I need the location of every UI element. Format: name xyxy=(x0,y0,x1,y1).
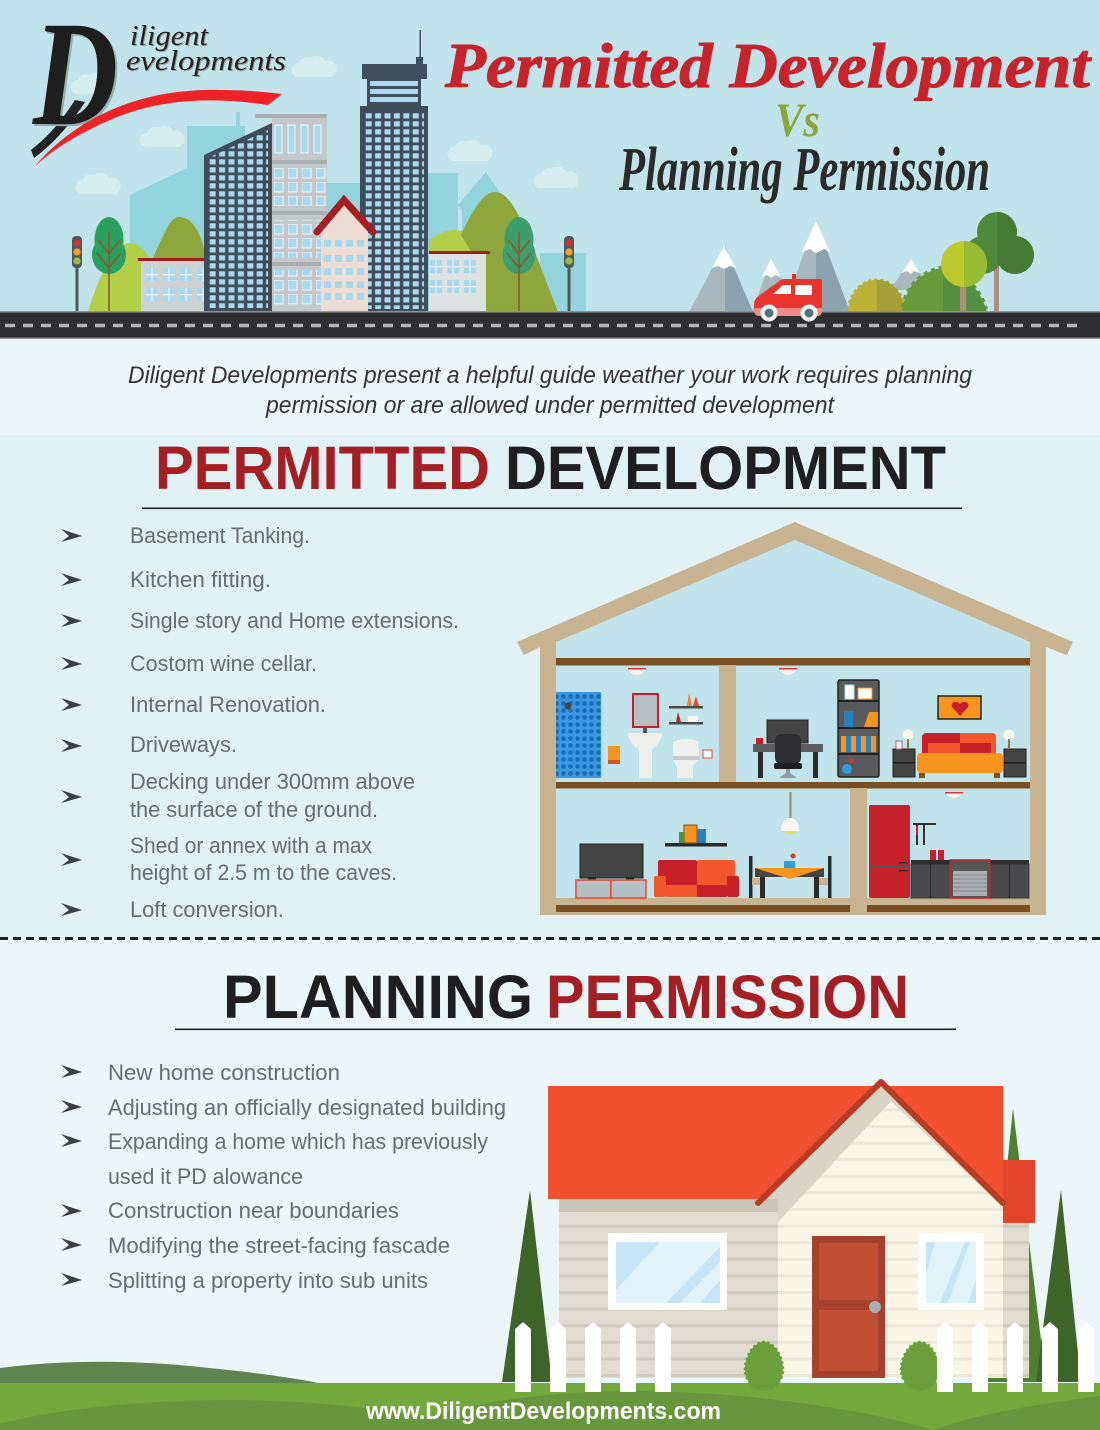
intro text xyxy=(128,362,973,419)
traffic lights xyxy=(72,236,574,312)
heading: planning permission: PLANNING xyxy=(223,963,533,1031)
heading: planning permission: PERMISSION xyxy=(546,963,909,1031)
header sky panel xyxy=(0,0,1100,340)
panel: permitted development xyxy=(0,434,1100,938)
bookcase xyxy=(838,680,879,777)
heading: planning permission xyxy=(223,963,909,1031)
logo: evelopments xyxy=(126,45,286,77)
website url: www.DiligentDevelopments.com xyxy=(365,1398,721,1425)
list: works needing permission: New home construction xyxy=(108,1060,340,1085)
dashed divider xyxy=(0,937,1100,940)
panel: planning permission xyxy=(0,938,1100,1430)
list: works needing permission: Construction near boundaries xyxy=(108,1198,399,1223)
heading: permitted development: PERMITTED xyxy=(155,434,490,502)
ground xyxy=(0,1362,1100,1430)
angled glass tower xyxy=(204,123,272,312)
list: permitted works: Single story and Home extensions. xyxy=(130,608,459,633)
cutaway house illustration xyxy=(517,522,1073,915)
dining area xyxy=(749,792,832,898)
red-roof townhouse xyxy=(317,200,373,312)
list: permitted works: Basement Tanking. xyxy=(130,523,310,548)
roadside trees xyxy=(941,212,1034,315)
list: permitted works: Kitchen fitting. xyxy=(130,567,271,592)
intro text: Diligent Developments present a helpful guide weather your work requires planning xyxy=(128,362,973,389)
list: permitted works: Internal Renovation. xyxy=(130,692,326,717)
bedroom xyxy=(893,696,1026,778)
list: works needing permission: Expanding a home which has previously xyxy=(108,1129,488,1154)
title: VS: Vs xyxy=(775,94,820,147)
logo: iligent xyxy=(130,20,209,52)
mid-rise grey building xyxy=(255,114,327,312)
kitchen xyxy=(869,805,1029,898)
front door xyxy=(812,1236,885,1378)
list: works needing permission: Modifying the street-facing fascade xyxy=(108,1233,450,1258)
intro band xyxy=(0,339,1100,435)
office xyxy=(753,720,823,778)
road xyxy=(0,311,1100,339)
logo xyxy=(31,0,286,166)
list: works needing permission: Splitting a property into sub units xyxy=(108,1268,428,1293)
list: permitted works xyxy=(61,523,459,922)
windows xyxy=(608,1233,984,1310)
list: permitted works: Driveways. xyxy=(130,732,237,757)
mountains xyxy=(689,221,932,312)
list: works needing permission: Adjusting an officially designated building xyxy=(108,1095,506,1120)
list: permitted works: the surface of the ground. xyxy=(130,797,378,822)
low buildings xyxy=(138,251,490,312)
bathroom xyxy=(556,692,712,778)
list: permitted works: Shed or annex with a max xyxy=(130,833,372,858)
suburban house xyxy=(548,1082,1035,1378)
picket fence xyxy=(515,1322,1094,1392)
list: works needing permission: used it PD alowance xyxy=(108,1164,303,1189)
shrubs xyxy=(745,1342,939,1390)
heading: permitted development: DEVELOPMENT xyxy=(505,434,946,502)
title: Permitted Development: Permitted Development xyxy=(444,30,1092,101)
list: works needing permission xyxy=(61,1060,506,1293)
street trees xyxy=(92,217,536,312)
ceiling lights xyxy=(628,668,963,798)
background skyline xyxy=(130,112,586,312)
list: permitted works: Loft conversion. xyxy=(130,897,284,922)
list: permitted works: Decking under 300mm above xyxy=(130,769,415,794)
bushes xyxy=(848,267,987,315)
red van xyxy=(754,274,822,322)
heading: permitted development xyxy=(155,434,946,502)
tall glass tower xyxy=(360,30,428,312)
intro text: permission or are allowed under permitted development xyxy=(265,392,835,419)
list: permitted works: Costom wine cellar. xyxy=(130,651,317,676)
cypress trees xyxy=(502,1108,1081,1382)
hills xyxy=(88,192,558,312)
clouds xyxy=(70,56,579,194)
living room xyxy=(576,825,739,898)
list: permitted works: height of 2.5 m to the caves. xyxy=(130,860,397,885)
